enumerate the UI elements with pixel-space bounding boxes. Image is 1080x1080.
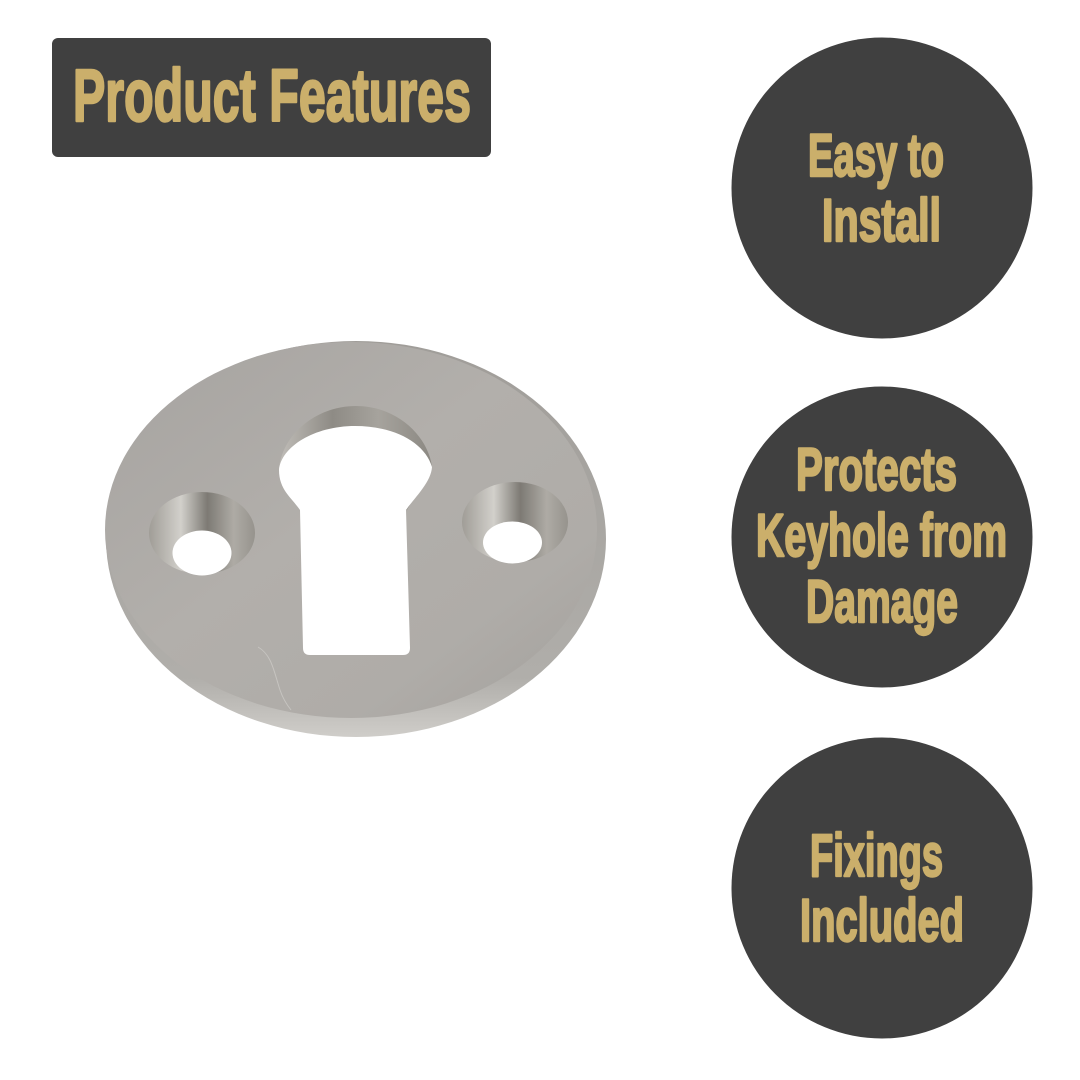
feature badge: Fixings Included: [732, 738, 1032, 1038]
badge text line 1: Fixings: [810, 822, 943, 889]
badge text line 2: Included: [800, 887, 964, 954]
plate edge: [106, 341, 606, 737]
badge text line 3: Damage: [806, 568, 958, 635]
product photo: round keyhole escutcheon: [105, 341, 606, 737]
scratch mark: [258, 647, 291, 710]
badge text line 1: Protects: [796, 436, 957, 503]
badge text line 1: Easy to: [808, 122, 944, 189]
feature badge: Easy to Install: [732, 38, 1032, 338]
badge text line 2: Install: [822, 187, 941, 254]
feature badge: Protects Keyhole from Damage: [732, 386, 1032, 688]
heading text: Product Features: [73, 54, 471, 137]
plate face: [105, 342, 597, 718]
keyhole opening: [279, 426, 432, 655]
left screw hole: [149, 492, 255, 576]
heading panel: Product Features: [52, 38, 491, 157]
keyhole bevel: [279, 406, 432, 510]
right screw hole: [462, 482, 568, 564]
